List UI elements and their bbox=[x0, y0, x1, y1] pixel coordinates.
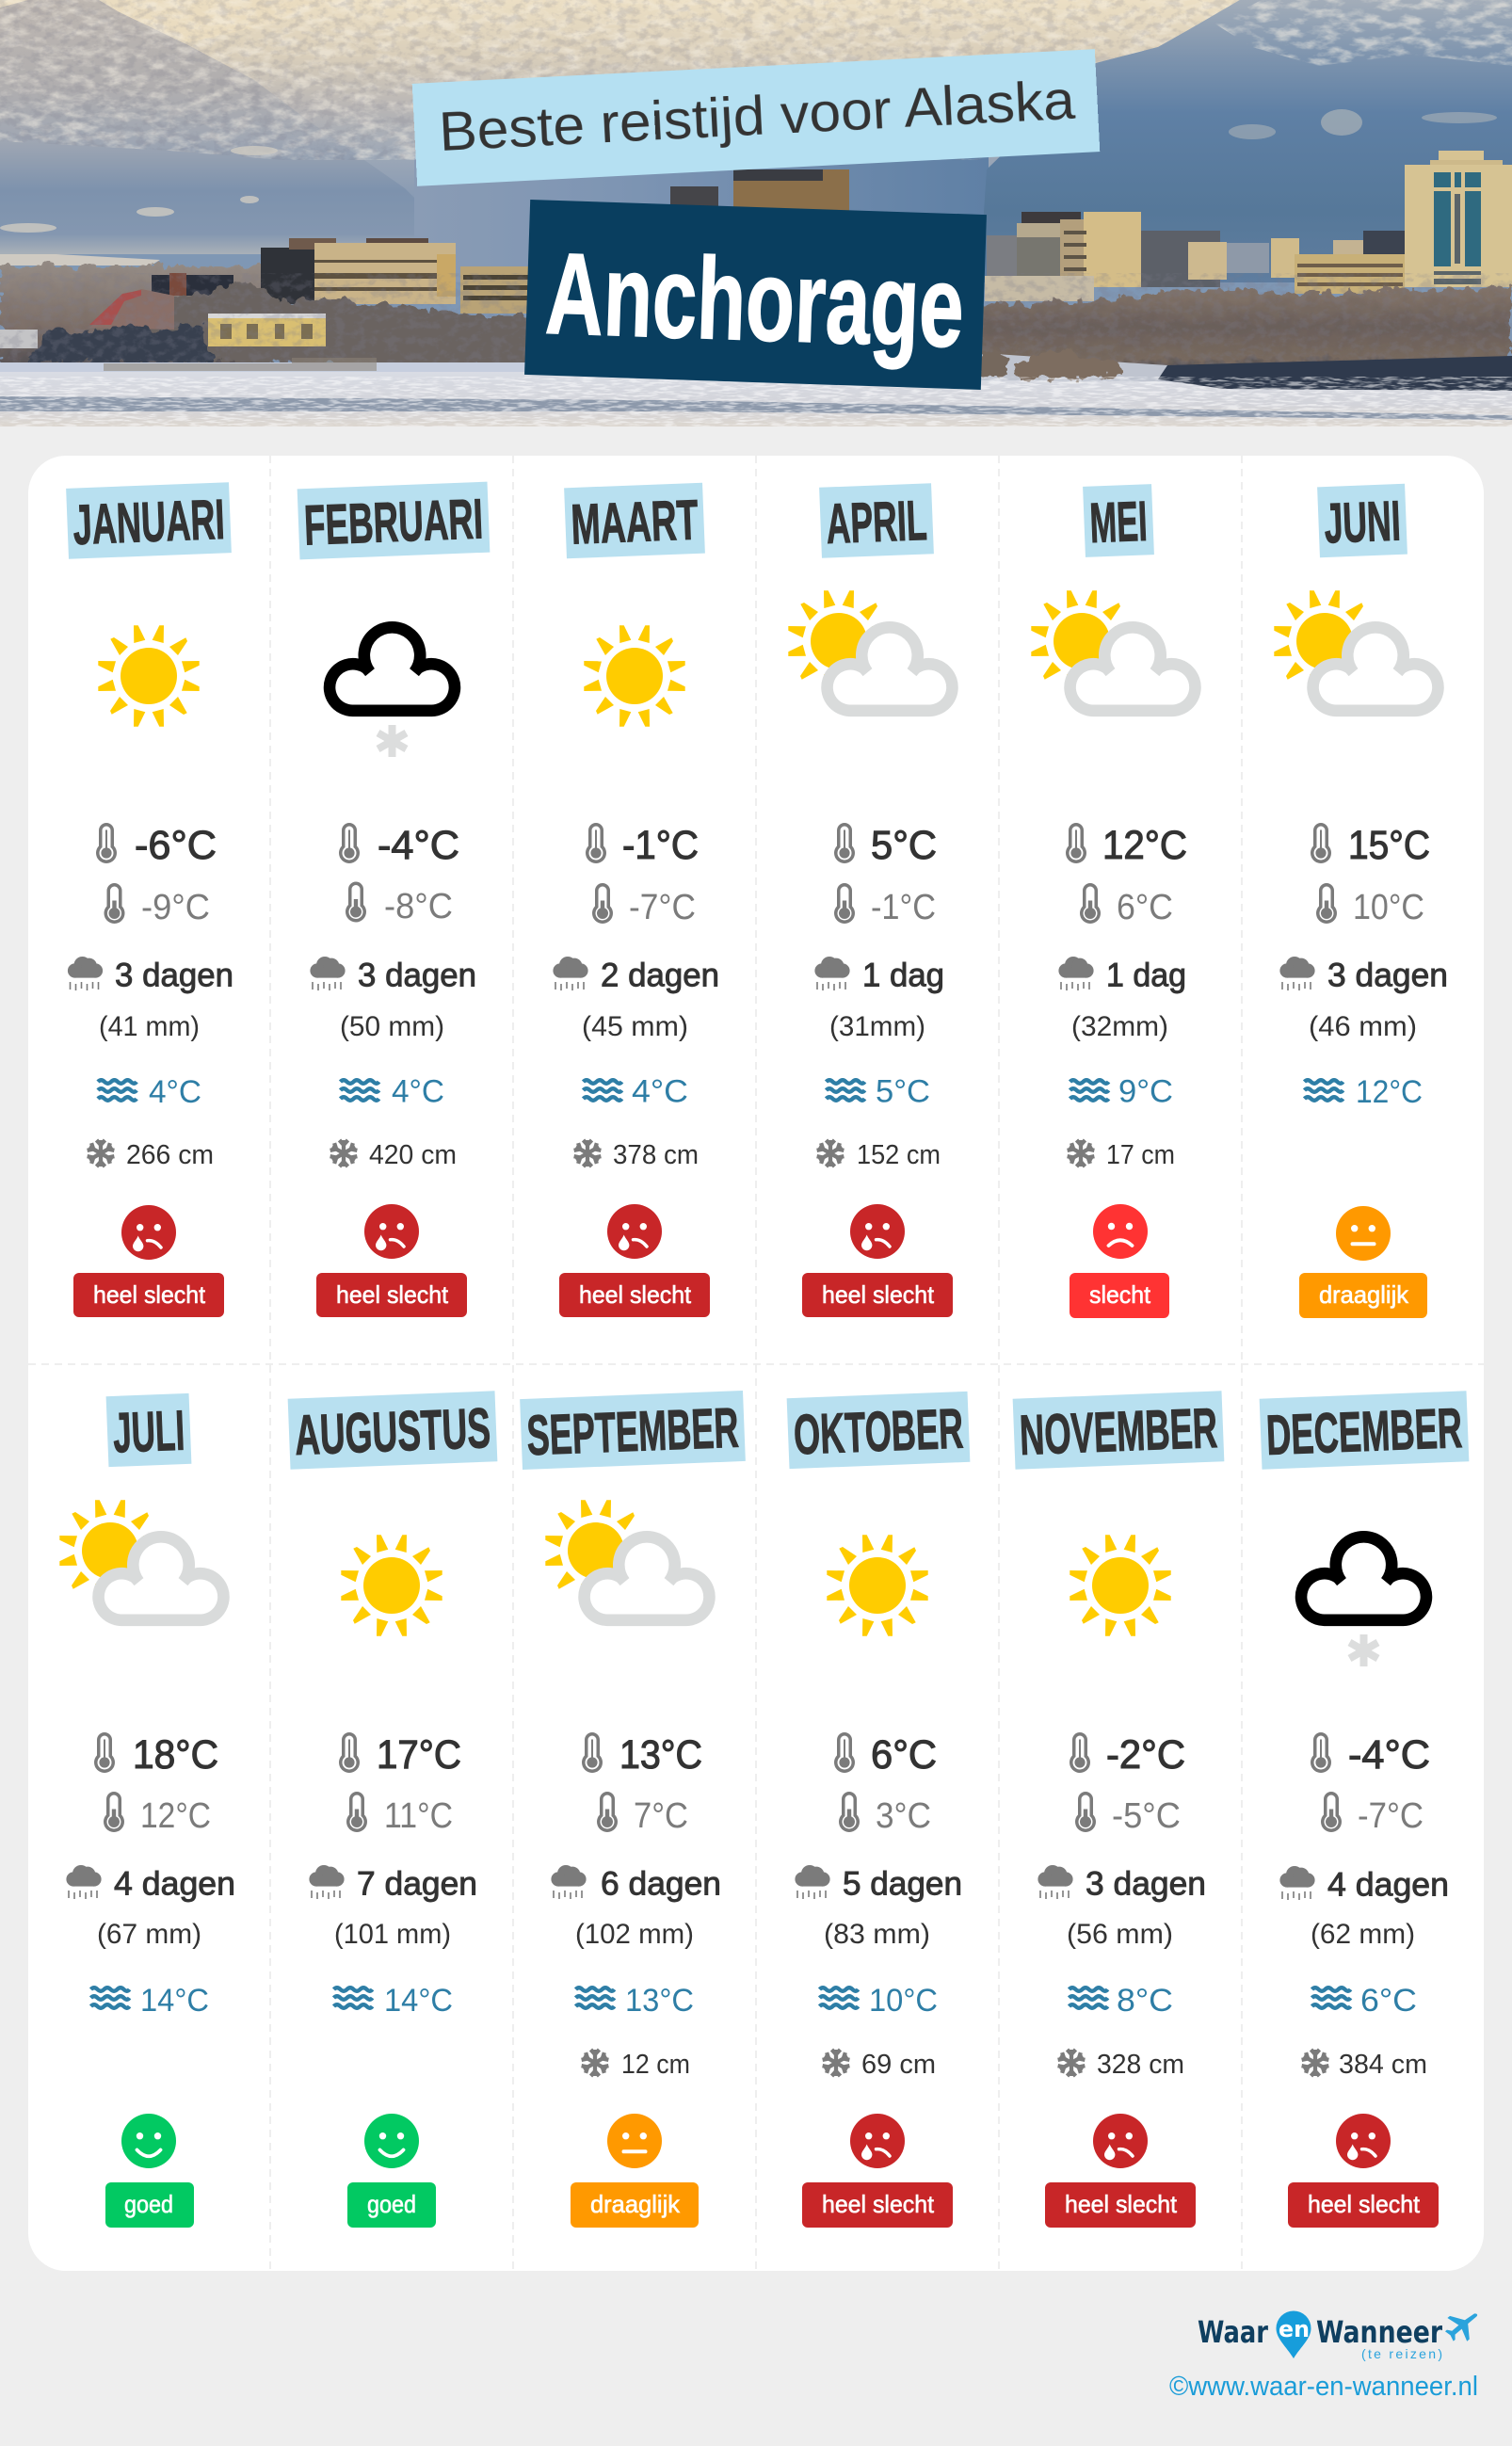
snowfall bbox=[582, 2050, 690, 2080]
rating badge bbox=[347, 2182, 436, 2228]
rating face bbox=[607, 2114, 662, 2168]
rain days: 6 dagen bbox=[601, 1866, 721, 1902]
snowfall: 266 cm bbox=[126, 1140, 214, 1170]
max temperature bbox=[834, 823, 937, 868]
heading: november: NOVEMBER bbox=[1019, 1396, 1218, 1467]
sea temperature bbox=[90, 1983, 209, 2019]
rain days bbox=[551, 1865, 721, 1902]
rating badge: draaglijk bbox=[590, 2190, 681, 2218]
panel: months card bbox=[28, 456, 1484, 2271]
rating badge: heel slecht bbox=[93, 1280, 206, 1309]
sea temperature bbox=[341, 1073, 444, 1109]
rainfall: (62 mm) bbox=[1311, 1919, 1415, 1950]
min temperature bbox=[346, 881, 453, 926]
heading: september bbox=[520, 1391, 746, 1470]
heading: juni: JUNI bbox=[1323, 489, 1402, 555]
sea temperature: 6°C bbox=[1360, 1983, 1417, 2019]
heading: maart: MAART bbox=[570, 488, 700, 556]
month: februari bbox=[298, 482, 490, 1317]
max temperature: -1°C bbox=[622, 823, 699, 868]
max temperature: -2°C bbox=[1106, 1732, 1185, 1778]
rain days: 2 dagen bbox=[601, 957, 719, 994]
rating face bbox=[364, 1204, 419, 1259]
max temperature bbox=[1066, 823, 1187, 868]
rating badge bbox=[73, 1273, 224, 1317]
snowfall bbox=[1068, 1140, 1175, 1170]
rainfall: (45 mm) bbox=[582, 1011, 688, 1042]
rain days: 7 dagen bbox=[357, 1866, 477, 1902]
sea temperature: 8°C bbox=[1117, 1983, 1173, 2019]
heading: november bbox=[1013, 1391, 1224, 1470]
snowfall: 378 cm bbox=[613, 1140, 699, 1170]
hero photo: Anchorage skyline with mountains bbox=[0, 0, 1512, 426]
month: augustus bbox=[288, 1391, 497, 2228]
snowfall: 69 cm bbox=[861, 2050, 936, 2080]
rating badge: goed bbox=[124, 2190, 173, 2218]
snowfall: 17 cm bbox=[1106, 1140, 1175, 1170]
month: maart bbox=[553, 483, 719, 1317]
snowfall bbox=[330, 1140, 457, 1170]
rainfall: (32mm) bbox=[1071, 1011, 1168, 1042]
rainfall: (56 mm) bbox=[1067, 1919, 1173, 1950]
max temperature: 13°C bbox=[619, 1732, 702, 1778]
snowfall bbox=[88, 1140, 214, 1170]
month: mei bbox=[1031, 484, 1195, 1318]
rain days: 3 dagen bbox=[115, 957, 233, 994]
icon: partly cloudy bbox=[59, 1500, 223, 1620]
sea temperature: 5°C bbox=[876, 1073, 930, 1109]
icon: sunny bbox=[827, 1535, 928, 1636]
max temperature: 15°C bbox=[1348, 823, 1430, 868]
max temperature: -6°C bbox=[135, 823, 217, 868]
sea temperature: 9°C bbox=[1118, 1073, 1173, 1109]
max temperature bbox=[586, 823, 699, 868]
sea temperature: 4°C bbox=[392, 1073, 444, 1109]
rating face bbox=[1093, 1204, 1148, 1259]
max temperature: 18°C bbox=[133, 1732, 218, 1778]
heading: juni bbox=[1317, 484, 1407, 557]
max temperature bbox=[1311, 823, 1430, 868]
rating badge bbox=[1299, 1273, 1427, 1318]
icon: sunny bbox=[584, 625, 685, 727]
icon: sunny bbox=[1070, 1535, 1171, 1636]
min temperature: 3°C bbox=[876, 1796, 931, 1836]
rating face bbox=[850, 1204, 905, 1259]
max temperature bbox=[94, 1732, 218, 1778]
snowfall bbox=[1302, 2050, 1427, 2080]
logo: Waar en Wanneer: Waar bbox=[1198, 2314, 1268, 2350]
rating badge: heel slecht bbox=[822, 2190, 935, 2218]
sea temperature: 4°C bbox=[632, 1073, 688, 1109]
max temperature: -4°C bbox=[378, 823, 459, 868]
icon: partly cloudy bbox=[545, 1500, 709, 1620]
icon: sunny bbox=[98, 625, 200, 727]
sea temperature bbox=[333, 1983, 453, 2019]
min temperature bbox=[1321, 1792, 1424, 1836]
sea temperature bbox=[584, 1073, 688, 1109]
rainfall: (83 mm) bbox=[824, 1919, 930, 1950]
sea temperature: 10°C bbox=[869, 1983, 938, 2019]
rating badge bbox=[1288, 2182, 1439, 2228]
min temperature: -5°C bbox=[1112, 1796, 1181, 1836]
icon: sunny bbox=[341, 1535, 442, 1636]
snowfall: 384 cm bbox=[1339, 2050, 1427, 2080]
min temperature: -7°C bbox=[1358, 1796, 1424, 1836]
month: juli bbox=[59, 1393, 235, 2228]
rating badge bbox=[802, 1273, 953, 1317]
rating badge bbox=[802, 2182, 953, 2228]
rating badge: slecht bbox=[1089, 1280, 1151, 1309]
snowfall bbox=[823, 2050, 936, 2080]
column and row separators bbox=[28, 456, 1484, 2271]
rain days bbox=[66, 1865, 235, 1902]
rating face bbox=[850, 2114, 905, 2168]
logo: Waar en Wanneer bbox=[1198, 2302, 1487, 2361]
logo: Waar en Wanneer: en bbox=[1279, 2316, 1310, 2342]
sea temperature bbox=[1312, 1983, 1417, 2019]
min temperature: 12°C bbox=[140, 1796, 211, 1836]
heading: februari bbox=[298, 482, 490, 559]
max temperature bbox=[582, 1732, 702, 1778]
max temperature bbox=[834, 1732, 937, 1778]
sea temperature: 14°C bbox=[384, 1983, 453, 2019]
min temperature bbox=[1080, 883, 1173, 927]
rating face bbox=[121, 2114, 176, 2168]
heading: januari: JANUARI bbox=[72, 488, 226, 556]
sea temperature bbox=[827, 1073, 930, 1109]
heading: april: APRIL bbox=[825, 489, 928, 555]
heading: maart bbox=[564, 483, 705, 558]
min temperature: -8°C bbox=[384, 887, 453, 926]
rating badge bbox=[559, 1273, 710, 1317]
max temperature bbox=[339, 823, 459, 868]
logo: Waar en Wanneer: Wanneer bbox=[1316, 2314, 1442, 2350]
rain days bbox=[814, 957, 944, 994]
rain days bbox=[1037, 1865, 1206, 1902]
month: oktober bbox=[787, 1392, 970, 2228]
min temperature: 11°C bbox=[384, 1796, 453, 1836]
sea temperature bbox=[819, 1983, 938, 2019]
rainfall: (50 mm) bbox=[340, 1011, 444, 1042]
month: november bbox=[1013, 1391, 1224, 2228]
min temperature bbox=[1316, 883, 1424, 927]
max temperature bbox=[96, 823, 217, 868]
rain days: 3 dagen bbox=[1327, 957, 1448, 994]
heading: oktober: OKTOBER bbox=[793, 1397, 964, 1466]
month: januari bbox=[66, 482, 233, 1317]
sea temperature bbox=[98, 1074, 201, 1110]
rating badge bbox=[105, 2182, 194, 2228]
snowfall: 328 cm bbox=[1097, 2050, 1184, 2080]
snowfall: 152 cm bbox=[857, 1140, 941, 1170]
subtitle banner: Beste reistijd voor Alaska: Beste reistijd voor Alaska bbox=[438, 70, 1077, 163]
icon: snow cloud bbox=[1301, 1537, 1426, 1666]
snowfall bbox=[574, 1140, 699, 1170]
min temperature bbox=[1075, 1792, 1181, 1836]
heading: augustus bbox=[288, 1391, 497, 1470]
icon: partly cloudy bbox=[1274, 590, 1438, 711]
max temperature: 6°C bbox=[871, 1732, 937, 1778]
sea temperature: 12°C bbox=[1356, 1074, 1423, 1110]
rating badge: heel slecht bbox=[1308, 2190, 1421, 2218]
rating face bbox=[1093, 2114, 1148, 2168]
rating badge: heel slecht bbox=[336, 1280, 449, 1309]
min temperature: -1°C bbox=[871, 888, 936, 927]
min temperature: -9°C bbox=[141, 888, 210, 927]
rating badge: goed bbox=[367, 2190, 416, 2218]
min temperature bbox=[834, 883, 936, 927]
max temperature bbox=[339, 1732, 461, 1778]
logo: Waar en Wanneer: (te reizen) bbox=[1361, 2346, 1442, 2361]
month: juni bbox=[1274, 484, 1448, 1318]
month: december bbox=[1260, 1391, 1469, 2228]
max temperature: 5°C bbox=[871, 823, 937, 868]
month: september bbox=[520, 1391, 746, 2228]
rating badge: heel slecht bbox=[1065, 2190, 1178, 2218]
rain days: 4 dagen bbox=[1327, 1866, 1449, 1904]
title banner: Anchorage: Anchorage bbox=[544, 230, 966, 372]
rainfall: (101 mm) bbox=[334, 1919, 451, 1950]
rainfall: (67 mm) bbox=[97, 1919, 201, 1950]
rating badge bbox=[316, 1273, 467, 1317]
snowfall: 420 cm bbox=[369, 1140, 457, 1170]
rain days bbox=[1058, 957, 1186, 994]
rating badge bbox=[571, 2182, 699, 2228]
title banner: Anchorage bbox=[524, 200, 987, 390]
heading: juli bbox=[106, 1393, 191, 1467]
sea temperature bbox=[1070, 1983, 1173, 2019]
max temperature bbox=[1311, 1732, 1430, 1778]
max temperature: 12°C bbox=[1102, 823, 1187, 868]
rainfall: (102 mm) bbox=[575, 1919, 694, 1950]
rating face bbox=[607, 1204, 662, 1259]
rating face bbox=[121, 1205, 176, 1260]
rain days bbox=[1279, 957, 1448, 994]
min temperature bbox=[346, 1792, 453, 1836]
sea temperature bbox=[576, 1983, 694, 2019]
snowfall bbox=[1058, 2050, 1184, 2080]
sea temperature: 13°C bbox=[625, 1983, 694, 2019]
max temperature bbox=[1070, 1732, 1185, 1778]
sea temperature: 14°C bbox=[140, 1983, 209, 2019]
icon: snow cloud bbox=[330, 627, 455, 757]
sea temperature bbox=[1070, 1073, 1173, 1109]
rating badge bbox=[1045, 2182, 1196, 2228]
min temperature bbox=[839, 1792, 931, 1836]
icon: partly cloudy bbox=[788, 590, 952, 711]
rain days: 4 dagen bbox=[114, 1866, 235, 1902]
rain days: 3 dagen bbox=[1086, 1866, 1206, 1902]
rainfall: (31mm) bbox=[829, 1011, 925, 1042]
rating badge: draaglijk bbox=[1319, 1280, 1409, 1309]
min temperature bbox=[104, 883, 210, 927]
rating face bbox=[1336, 1206, 1391, 1261]
subtitle banner: Beste reistijd voor Alaska bbox=[412, 49, 1100, 186]
rating face bbox=[364, 2114, 419, 2168]
heading: september: SEPTEMBER bbox=[525, 1396, 740, 1467]
min temperature: 7°C bbox=[634, 1796, 688, 1836]
website url: ©www.waar-en-wanneer.nl bbox=[1169, 2372, 1478, 2402]
snowfall bbox=[817, 1140, 941, 1170]
rain days bbox=[1279, 1866, 1449, 1904]
rating badge: heel slecht bbox=[822, 1280, 935, 1309]
rating badge bbox=[1070, 1273, 1169, 1318]
snowfall: 12 cm bbox=[621, 2050, 690, 2080]
heading: mei bbox=[1083, 484, 1154, 557]
min temperature bbox=[104, 1792, 211, 1836]
rainfall: (46 mm) bbox=[1309, 1011, 1417, 1042]
heading: april bbox=[819, 483, 934, 558]
rain days: 1 dag bbox=[862, 957, 944, 994]
heading: oktober bbox=[787, 1392, 970, 1469]
min temperature: 10°C bbox=[1353, 888, 1424, 927]
rain days: 1 dag bbox=[1106, 957, 1186, 994]
rainfall: (41 mm) bbox=[99, 1011, 200, 1042]
sea temperature bbox=[1305, 1074, 1423, 1110]
sea temperature: 4°C bbox=[149, 1074, 201, 1110]
rain days: 3 dagen bbox=[358, 957, 476, 994]
min temperature bbox=[597, 1792, 688, 1836]
heading: juli: JULI bbox=[112, 1399, 185, 1464]
min temperature: -7°C bbox=[629, 888, 696, 927]
min temperature: 6°C bbox=[1117, 888, 1173, 927]
heading: januari bbox=[66, 482, 232, 559]
month: april bbox=[788, 483, 953, 1317]
min temperature bbox=[592, 883, 696, 927]
heading: februari: FEBRUARI bbox=[303, 487, 484, 557]
rain days: 5 dagen bbox=[843, 1866, 962, 1902]
icon: partly cloudy bbox=[1031, 590, 1195, 711]
max temperature: 17°C bbox=[377, 1732, 461, 1778]
rating face bbox=[1336, 2114, 1391, 2168]
heading: augustus: AUGUSTUS bbox=[294, 1396, 491, 1467]
rating badge: heel slecht bbox=[579, 1280, 692, 1309]
rain days bbox=[309, 1865, 477, 1902]
heading: mei: MEI bbox=[1088, 490, 1149, 555]
max temperature: -4°C bbox=[1348, 1732, 1430, 1778]
